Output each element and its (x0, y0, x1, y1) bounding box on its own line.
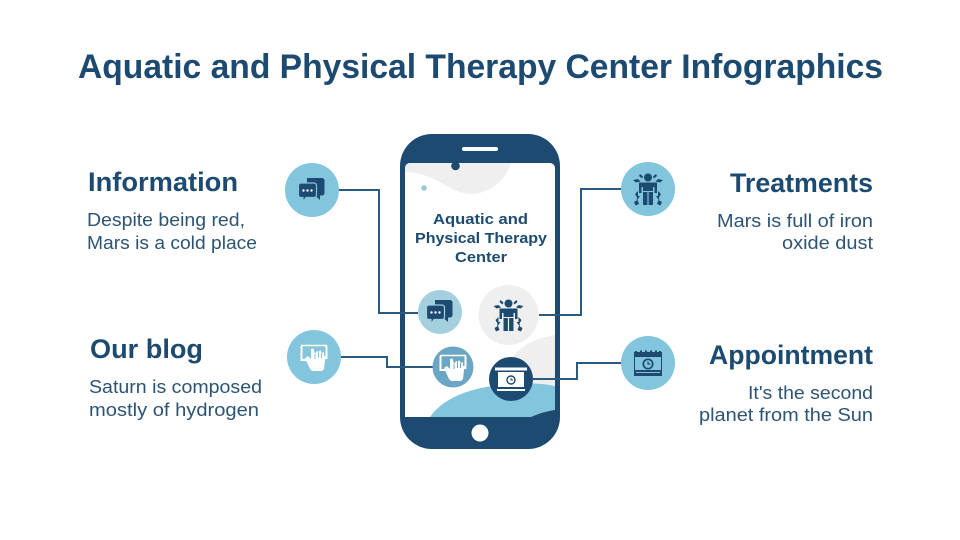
panel: treatments (621, 162, 873, 253)
panel: information (87, 163, 339, 253)
screen decoration: dark corner (531, 410, 555, 417)
text: information: Despite being red, (87, 210, 245, 230)
icon: body on phone (478, 285, 538, 345)
icon: chat on phone (418, 290, 462, 334)
speaker (462, 147, 498, 151)
icon: hand on phone (432, 346, 474, 388)
connector: our blog (341, 357, 433, 367)
connector: appointment (533, 363, 621, 379)
heading: our blog: Our blog (90, 334, 203, 364)
text: appointment (699, 383, 873, 425)
heading: information: Information (88, 167, 238, 197)
text: information: Mars is a cold place (87, 233, 257, 253)
text: our blog (89, 377, 262, 420)
panel: our blog (89, 330, 341, 420)
small dot (421, 185, 427, 191)
title: Aquatic and Physical Therapy Center Infographics (78, 48, 883, 86)
phone heading: Center (455, 249, 507, 266)
icon: hand (287, 330, 341, 384)
icon: chat (285, 163, 339, 217)
screen decoration: top gray blob (405, 163, 511, 194)
panel: phone (400, 134, 560, 449)
text: treatments: oxide dust (782, 233, 873, 253)
phone heading: Physical Therapy (415, 230, 548, 247)
connector: information (339, 190, 418, 313)
text: information (87, 210, 257, 253)
phone body (400, 134, 560, 449)
phone heading (415, 211, 548, 266)
text: appointment: planet from the Sun (699, 405, 873, 425)
home button (472, 424, 488, 442)
text: our blog: mostly of hydrogen (89, 400, 259, 420)
icon: body (621, 162, 675, 216)
camera dot (451, 162, 460, 170)
text: treatments: Mars is full of iron (717, 211, 873, 231)
text: treatments (717, 211, 873, 253)
phone heading: Aquatic and (433, 211, 528, 228)
phone screen (405, 163, 555, 417)
icon: calendar on phone (489, 357, 533, 401)
screen decoration: bottom gray blob (512, 335, 555, 385)
panel: appointment (621, 336, 873, 425)
heading: appointment: Appointment (709, 340, 873, 370)
icon: calendar (621, 336, 675, 390)
screen decoration: blue hill (430, 383, 555, 417)
connector: treatments (539, 189, 621, 315)
text: our blog: Saturn is composed (89, 377, 262, 397)
text: appointment: It's the second (748, 383, 873, 403)
heading: treatments: Treatments (730, 168, 873, 198)
